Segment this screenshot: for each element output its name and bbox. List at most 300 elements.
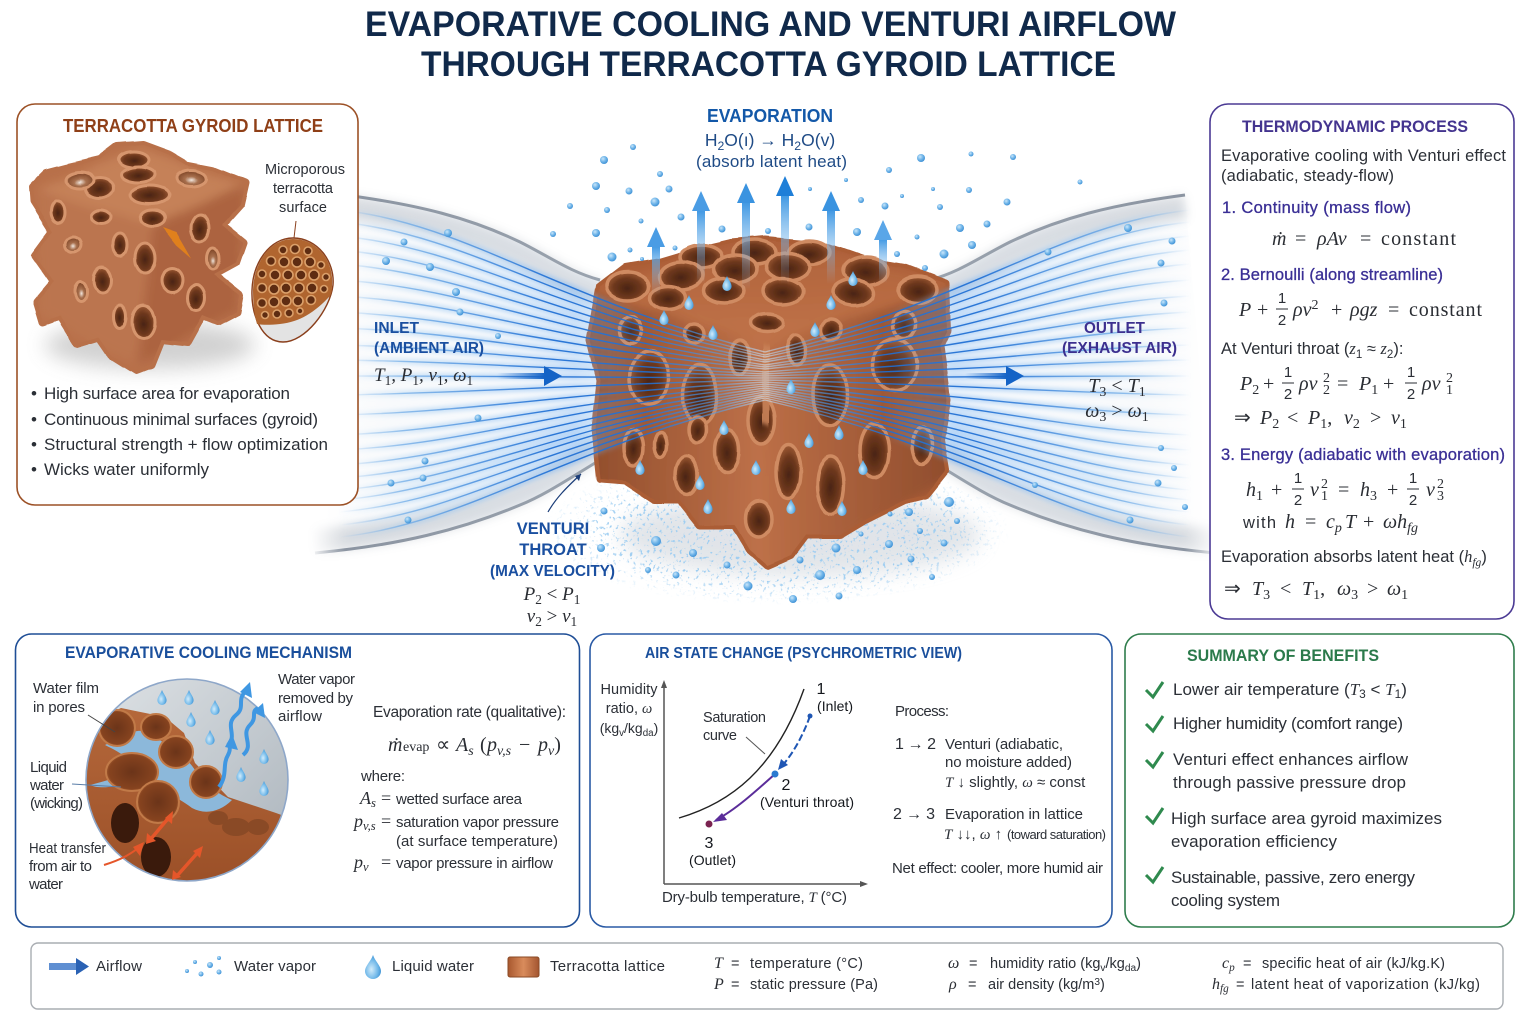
energy: v: [1310, 479, 1319, 501]
variable definitions: [352, 768, 559, 874]
latent heat statement: 3: [1263, 588, 1270, 603]
callouts on illustration: water: [29, 777, 64, 794]
callouts on illustration: water: [28, 876, 63, 893]
process path 2 to 3: [716, 774, 775, 820]
legend: symbols column two: =: [969, 956, 977, 972]
variable definitions: s: [371, 796, 376, 810]
water droplets on the lattice: [635, 271, 868, 516]
label: evaporation: O(v): [801, 130, 835, 150]
bernoulli at throat: 2: [1284, 386, 1292, 403]
energy: 1: [1256, 489, 1263, 504]
label: venturi throat: [490, 474, 615, 629]
psychrometric chart: curve: [703, 728, 737, 744]
legend: symbols column one: P: [713, 976, 724, 993]
evaporation rate equation: −: [519, 734, 530, 756]
label: outlet: <: [1106, 375, 1128, 397]
bernoulli at throat: 2: [1323, 383, 1330, 398]
legend: symbols column three: latent heat of vaporization (kJ/kg): [1251, 977, 1480, 993]
panel heading: SUMMARY OF BENEFITS: [1187, 647, 1379, 665]
psychrometric chart: Saturation: [703, 710, 766, 726]
state point labels: 2: [782, 777, 791, 794]
variable definitions: =: [381, 788, 391, 808]
bullet list: •: [31, 435, 37, 454]
latent heat statement: ): [1481, 548, 1487, 566]
bullet list: High surface area for evaporation: [44, 384, 290, 403]
callouts on illustration: from air to: [29, 858, 92, 875]
energy: p: [1334, 521, 1342, 536]
legend: symbols column two: /kg: [1105, 956, 1125, 972]
label: microporous surface: Microporous: [265, 162, 345, 178]
venturi throat condition: 1: [1356, 349, 1362, 361]
callouts on illustration: airflow: [278, 708, 322, 725]
label: outlet: 1: [1142, 410, 1149, 425]
process description: Process:: [895, 703, 949, 720]
energy: 2: [1321, 477, 1328, 492]
bernoulli at throat: 1: [1446, 383, 1453, 398]
label: venturi throat: 1: [571, 614, 577, 629]
process description: no moisture added): [945, 754, 1072, 771]
variable definitions: v,s: [363, 819, 376, 833]
check marks: [1146, 682, 1163, 882]
energy: 2: [1437, 477, 1444, 492]
saturation curve: [679, 689, 804, 818]
venturi duct: left and right walls: [315, 195, 1215, 553]
label: venturi throat: v: [562, 606, 571, 627]
bernoulli at throat: P: [1259, 407, 1272, 429]
energy: with: [1242, 514, 1276, 532]
state point labels: (Inlet): [817, 698, 853, 714]
label: venturi throat: 2: [535, 592, 542, 607]
label: inlet: (AMBIENT AIR): [374, 340, 484, 357]
state point labels: (Venturi throat): [760, 794, 854, 810]
label: outlet: ω: [1085, 400, 1099, 422]
label: venturi throat: P: [561, 584, 574, 605]
benefit list: [1171, 680, 1442, 910]
floor shadow with water speckle: [552, 482, 1003, 603]
legend: symbols column two: da: [1125, 963, 1136, 974]
psychrometric chart: Dry-bulb temperature, T (°C): [662, 889, 847, 906]
label: outlet: 3: [1099, 410, 1106, 425]
legend: airflow: [49, 958, 142, 975]
variable definitions: =: [381, 811, 391, 831]
variable definitions: where:: [360, 768, 405, 785]
legend: symbols column three: fg: [1220, 983, 1229, 995]
wavy vapor arrows: [219, 691, 258, 787]
bernoulli: 1: [1278, 290, 1286, 307]
legend: symbols column two: =: [968, 977, 976, 993]
label: outlet: ω: [1128, 400, 1142, 422]
process description: 2 → 3: [893, 806, 935, 823]
latent heat statement: fg: [1472, 557, 1482, 569]
bullet list: Continuous minimal surfaces (gyroid): [44, 410, 318, 429]
legend: symbols column three: h: [1212, 976, 1220, 993]
evaporation rate equation: ): [554, 734, 561, 756]
latent heat statement: T: [1302, 578, 1315, 600]
label: inlet: , P: [391, 365, 413, 386]
bernoulli at throat: 2: [1323, 371, 1330, 386]
state point labels: 3: [705, 835, 714, 852]
bernoulli at throat: 2: [1353, 417, 1360, 432]
callouts on illustration: Heat transfer: [29, 840, 106, 857]
evaporation rate equation: evap: [403, 740, 429, 755]
state point labels: (Outlet): [689, 852, 736, 868]
label: outlet: 3: [1099, 385, 1106, 400]
process description: T ↓↓, ω ↑: [944, 826, 1002, 843]
illustration: pore cross-section: [80, 679, 295, 890]
evaporation arrows rising from the lattice: [647, 176, 892, 295]
latent heat statement: ⇒: [1224, 578, 1241, 600]
label: inlet: 1: [437, 373, 444, 388]
label: outlet: OUTLET: [1084, 320, 1145, 337]
callouts on illustration: in pores: [33, 699, 85, 716]
state point labels: 1: [817, 681, 826, 698]
continuity: ρAv: [1316, 228, 1347, 250]
legend: airflow: Airflow: [96, 958, 142, 975]
process path 1 to 2: [781, 716, 810, 767]
benefit list: T: [1385, 680, 1396, 699]
psychrometric chart: ): [654, 720, 658, 736]
process description: Evaporation in lattice: [945, 806, 1083, 823]
bernoulli: constant: [1409, 299, 1482, 321]
panel heading: EVAPORATIVE COOLING MECHANISM: [65, 644, 352, 662]
label: microporous surface: [265, 162, 345, 238]
callouts on illustration: Liquid: [30, 759, 67, 776]
continuity: constant: [1381, 228, 1456, 250]
latent heat statement: 1: [1313, 588, 1320, 603]
energy: ωh: [1383, 511, 1407, 533]
intro text: Evaporative cooling with Venturi effect: [1221, 147, 1506, 165]
bernoulli at throat: P: [1307, 407, 1320, 429]
continuity: ṁ: [1272, 228, 1286, 250]
venturi throat condition: ≈: [1362, 340, 1380, 358]
callouts on illustration: [28, 671, 355, 893]
legend: symbols column three: specific heat of air (kJ/kg.K): [1262, 956, 1445, 972]
bernoulli at throat: 1: [1284, 364, 1292, 381]
evaporation rate equation: v: [548, 744, 555, 759]
label: evaporation: (absorb latent heat): [696, 152, 847, 171]
bernoulli: +: [1257, 299, 1268, 321]
bernoulli at throat: 1: [1320, 417, 1327, 432]
energy: =: [1338, 479, 1349, 501]
label: evaporation: O(ı) → H: [724, 130, 794, 150]
bernoulli at throat: ,: [1327, 407, 1332, 429]
water beads carried on streamlines: [382, 224, 1188, 524]
label: inlet: INLET: [374, 320, 419, 337]
scattered droplets on the floor: [597, 497, 960, 603]
label: microporous surface: terracotta: [273, 181, 334, 197]
bernoulli at throat: +: [1263, 373, 1274, 395]
gyroid lattice cube: [32, 145, 245, 370]
bullet list: •: [31, 410, 37, 429]
venturi throat condition: z: [1379, 339, 1387, 358]
label: inlet: 1: [467, 373, 473, 388]
benefit list: ): [1401, 680, 1407, 699]
psychrometric chart: [600, 680, 868, 906]
bernoulli at throat: <: [1287, 407, 1298, 429]
label: venturi throat: (MAX VELOCITY): [490, 563, 615, 580]
legend: water vapor: [185, 956, 316, 976]
variable definitions: p: [352, 811, 363, 831]
energy: v: [1426, 479, 1435, 501]
label: outlet: 1: [1139, 385, 1146, 400]
title: EVAPORATIVE COOLING AND VENTURI AIRFLOW: [365, 4, 1176, 44]
label: inlet: T: [374, 365, 386, 386]
latent heat statement: ω: [1337, 578, 1351, 600]
energy: 2: [1294, 492, 1302, 509]
bernoulli at throat: +: [1383, 373, 1394, 395]
evaporation rate equation: (: [480, 734, 487, 756]
legend: symbols column two: ): [1136, 956, 1141, 972]
legend: symbols column two: v: [1100, 963, 1106, 974]
energy: h: [1360, 479, 1370, 501]
energy: 1: [1409, 470, 1417, 487]
benefit list: <: [1366, 680, 1385, 699]
energy: +: [1363, 511, 1374, 533]
label: venturi throat: VENTURI: [517, 520, 589, 538]
label: inlet: [374, 320, 484, 388]
evaporation rate equation: v,s: [497, 744, 512, 759]
bernoulli at throat: ρv: [1298, 373, 1318, 395]
legend: symbols column two: ω: [948, 955, 959, 972]
psychrometric chart: (kg: [600, 720, 619, 736]
label: venturi throat: 2: [535, 614, 542, 629]
label: evaporation: [696, 106, 847, 171]
bernoulli: [1221, 266, 1482, 329]
bernoulli: ρgz: [1349, 299, 1378, 321]
bernoulli at throat: 2: [1407, 386, 1415, 403]
bullet list: •: [31, 384, 37, 403]
state point labels: [689, 681, 854, 868]
legend: symbols column two: ): [1100, 977, 1105, 993]
bullet list: [31, 384, 328, 479]
energy: h: [1246, 479, 1256, 501]
bernoulli: P: [1238, 299, 1251, 321]
title: THROUGH TERRACOTTA GYROID LATTICE: [421, 44, 1116, 84]
legend: symbols column one: =: [731, 956, 739, 972]
process description: [892, 703, 1106, 877]
label: venturi throat: THROAT: [519, 541, 587, 559]
bullet list: Wicks water uniformly: [44, 460, 210, 479]
bernoulli: ρv: [1292, 299, 1312, 321]
legend: terracotta lattice: Terracotta lattice: [550, 958, 665, 975]
evaporation rate equation: [373, 704, 566, 759]
bernoulli at throat: 2: [1252, 383, 1259, 398]
latent heat statement: T: [1252, 578, 1265, 600]
evaporation rate equation: A: [454, 734, 469, 756]
legend: symbols column two: ρ: [948, 976, 957, 993]
legend: [31, 943, 1503, 1009]
energy: 1: [1294, 470, 1302, 487]
panel: evaporative cooling mechanism: [16, 634, 580, 927]
bernoulli at throat: [1234, 364, 1453, 432]
venturi throat condition: ):: [1393, 340, 1403, 358]
energy: 2: [1409, 492, 1417, 509]
benefit list: Higher humidity (comfort range): [1173, 714, 1403, 733]
legend: symbols column three: =: [1243, 956, 1251, 972]
energy: 3: [1370, 489, 1377, 504]
process description: Venturi (adiabatic,: [945, 736, 1063, 753]
bernoulli at throat: ⇒: [1234, 407, 1251, 429]
intro text: [1221, 147, 1506, 185]
panel: air state change psychrometric view: [590, 634, 1112, 927]
central terracotta gyroid lattice: [580, 230, 965, 580]
legend: symbols column one: [713, 955, 878, 993]
water vapour droplets above the lattice: [550, 144, 1082, 271]
label: venturi throat: 1: [574, 592, 580, 607]
arrow: inlet airflow: [497, 366, 562, 386]
label: venturi throat: P: [523, 584, 536, 605]
heat transfer arrows: [104, 811, 203, 880]
energy: T: [1345, 511, 1358, 533]
arrow: outlet airflow: [965, 366, 1024, 386]
panel heading: TERRACOTTA GYROID LATTICE: [63, 116, 323, 136]
benefit list: evaporation efficiency: [1171, 832, 1338, 851]
latent heat statement: 3: [1351, 588, 1358, 603]
label: outlet: (EXHAUST AIR): [1062, 340, 1177, 357]
legend: symbols column one: temperature (°C): [750, 956, 863, 972]
title: [365, 4, 1176, 84]
panel: terracotta gyroid lattice: [17, 104, 358, 505]
benefit list: Lower air temperature (T: [1173, 680, 1359, 699]
legend: symbols column one: static pressure (Pa): [750, 977, 878, 993]
variable definitions: A: [359, 788, 372, 808]
legend: liquid water: [365, 955, 474, 979]
variable definitions: p: [352, 852, 363, 872]
bernoulli at throat: v: [1344, 407, 1353, 429]
legend: symbols column two: air density (kg/m: [988, 977, 1094, 993]
energy: +: [1387, 479, 1398, 501]
evaporation rate equation: ṁ: [388, 734, 402, 756]
psychrometric chart: ratio, ω: [606, 701, 652, 717]
callouts on illustration: Water film: [33, 680, 99, 697]
inset: microporous surface detail: [252, 238, 333, 342]
bullet list: Structural strength + flow optimization: [44, 435, 328, 454]
panel heading: AIR STATE CHANGE (PSYCHROMETRIC VIEW): [645, 645, 962, 662]
label: inlet: 1: [385, 373, 391, 388]
cube shadow: [45, 321, 255, 369]
energy: +: [1271, 479, 1282, 501]
legend: symbols column two: humidity ratio (kg: [990, 956, 1100, 972]
energy: h: [1285, 511, 1295, 533]
legend: symbols column one: =: [731, 977, 739, 993]
energy: 1: [1321, 489, 1328, 504]
legend: symbols column three: c: [1222, 955, 1229, 972]
bernoulli: 2: [1278, 312, 1286, 329]
psychrometric chart: Humidity: [600, 682, 658, 698]
benefit list: through passive pressure drop: [1173, 773, 1406, 792]
variable definitions: v: [363, 860, 369, 874]
energy: 3. Energy (adiabatic with evaporation): [1221, 446, 1505, 464]
latent heat statement: ,: [1320, 578, 1325, 600]
evaporation rate equation: s: [468, 744, 474, 759]
benefit list: 3: [1359, 687, 1366, 701]
label: venturi throat: v: [527, 606, 536, 627]
psychrometric chart: /kg: [624, 720, 643, 736]
label: evaporation: H: [705, 130, 717, 150]
bernoulli at throat: 2: [1446, 371, 1453, 386]
energy: c: [1326, 511, 1335, 533]
label: inlet: 1: [412, 373, 419, 388]
label: venturi throat: <: [542, 584, 562, 605]
latent heat statement: Evaporation absorbs latent heat (h: [1221, 547, 1472, 566]
evaporation rate equation: p: [536, 734, 548, 756]
process description: (toward saturation): [1007, 827, 1106, 842]
legend: symbols column three: [1212, 955, 1480, 995]
bernoulli: +: [1331, 299, 1342, 321]
variable definitions: (at surface temperature): [396, 833, 558, 850]
bernoulli at throat: 2: [1272, 417, 1279, 432]
panel: thermodynamic process: [1210, 104, 1514, 619]
process description: T ↓ slightly, ω ≈ const: [945, 774, 1086, 791]
label: evaporation: EVAPORATION: [707, 106, 833, 126]
energy: 3: [1437, 489, 1444, 504]
callouts on illustration: (wicking): [30, 795, 83, 812]
energy: =: [1305, 511, 1316, 533]
label: outlet: T: [1088, 375, 1101, 397]
bernoulli at throat: P: [1239, 373, 1252, 395]
benefit list: Sustainable, passive, zero energy: [1171, 868, 1416, 887]
label: outlet: T: [1128, 375, 1141, 397]
latent heat statement: ω: [1387, 578, 1401, 600]
bernoulli at throat: =: [1337, 373, 1348, 395]
label: evaporation: 2: [717, 139, 724, 153]
variable definitions: wetted surface area: [395, 791, 523, 808]
venturi throat condition: 2: [1387, 349, 1393, 361]
variable definitions: saturation vapor pressure: [396, 814, 559, 831]
bernoulli at throat: P: [1358, 373, 1371, 395]
process description: 1 → 2: [895, 736, 936, 753]
legend: terracotta lattice: [508, 957, 665, 977]
continuity: =: [1360, 228, 1371, 250]
energy: fg: [1407, 521, 1418, 536]
bernoulli: 2: [1311, 298, 1318, 313]
variable definitions: vapor pressure in airflow: [396, 855, 553, 872]
bernoulli: =: [1388, 299, 1399, 321]
psychrometric chart: da: [643, 728, 654, 739]
vapor droplets: [157, 690, 269, 796]
latent heat statement: >: [1367, 578, 1378, 600]
legend: symbols column one: T: [714, 955, 724, 972]
continuity: =: [1295, 228, 1306, 250]
bernoulli at throat: ρv: [1421, 373, 1441, 395]
evaporation rate equation: ∝: [436, 734, 450, 756]
airflow streamlines through the venturi throat: [340, 210, 1190, 537]
label: evaporation: 2: [794, 139, 801, 153]
process description: Net effect: cooler, more humid air: [892, 860, 1103, 877]
legend: symbols column three: =: [1236, 977, 1244, 993]
bernoulli at throat: 1: [1407, 364, 1415, 381]
benefit list: High surface area gyroid maximizes: [1171, 809, 1442, 828]
benefit list: Venturi effect enhances airflow: [1173, 750, 1409, 769]
bernoulli at throat: >: [1370, 407, 1381, 429]
latent heat statement: <: [1280, 578, 1291, 600]
legend: water vapor: Water vapor: [234, 958, 316, 975]
continuity: 1. Continuity (mass flow): [1222, 199, 1411, 217]
legend: liquid water: Liquid water: [392, 958, 474, 975]
legend: symbols column two: 3: [1094, 977, 1100, 988]
intro text: (adiabatic, steady-flow): [1221, 167, 1394, 185]
label: inlet: , v: [419, 365, 438, 386]
bernoulli at throat: v: [1391, 407, 1400, 429]
legend: symbols column two: [948, 955, 1141, 993]
bernoulli: 2. Bernoulli (along streamline): [1221, 266, 1443, 284]
bernoulli at throat: 1: [1400, 417, 1407, 432]
venturi throat condition: At Venturi throat (z: [1221, 339, 1356, 358]
evaporation rate equation: Evaporation rate (qualitative):: [373, 704, 566, 721]
variable definitions: =: [381, 852, 391, 872]
label: venturi throat: >: [542, 606, 562, 627]
label: inlet: , ω: [444, 365, 467, 386]
